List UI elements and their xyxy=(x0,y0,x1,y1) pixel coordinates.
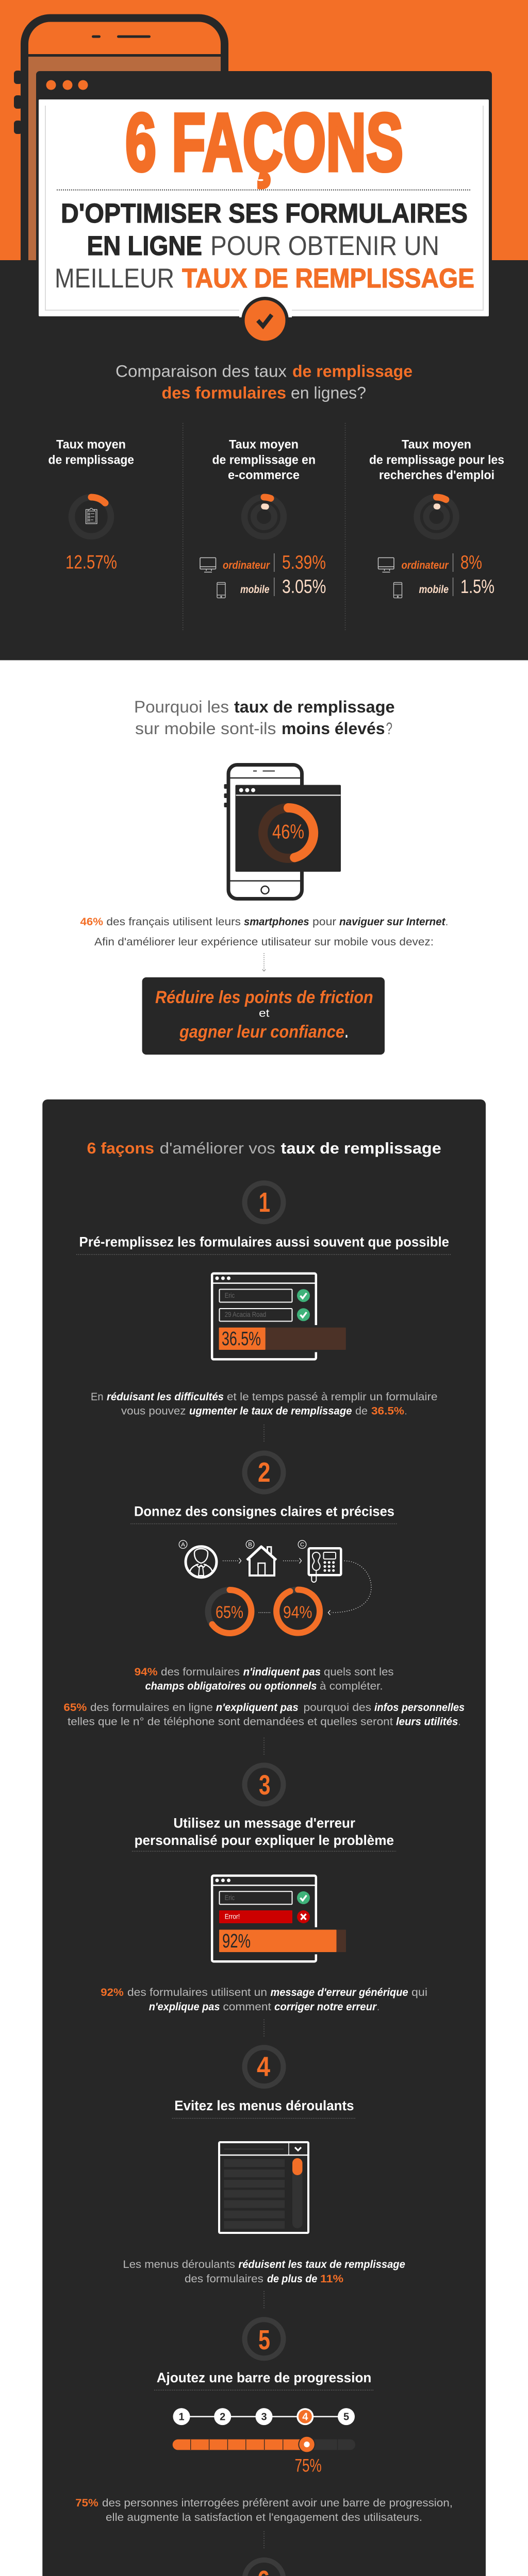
number badge 5 xyxy=(244,2319,284,2358)
number badge 3 xyxy=(244,1765,284,1804)
icon: person A xyxy=(179,1540,217,1578)
text: smartphones statistic: smartphones xyxy=(244,916,309,928)
text: step 1: vous pouvez xyxy=(121,1405,186,1417)
heading: why mobile rates are lower: moins élevés xyxy=(282,719,385,738)
heading: six ways: taux de remplissage xyxy=(281,1139,441,1157)
value: desktop 5.39% xyxy=(223,552,326,573)
text: smartphones statistic: naviguer sur Internet xyxy=(339,916,446,928)
value: desktop 8% xyxy=(401,552,482,573)
column: average rate xyxy=(48,438,134,573)
text: step 2: des formulaires en ligne xyxy=(90,1702,213,1714)
column: e-commerce rate xyxy=(200,438,326,598)
illustration: step indicator: 5 xyxy=(343,2411,349,2422)
heading: step 4: Evitez les menus déroulants xyxy=(174,2098,354,2113)
icon: person A: A xyxy=(181,1541,186,1548)
text: step 1: et le temps passé à remplir un formulaire xyxy=(227,1391,437,1403)
text: step 3: corriger notre erreur xyxy=(274,2001,377,2013)
heading: six ways: d'améliorer vos xyxy=(160,1139,275,1157)
value: desktop 8%: ordinateur xyxy=(401,560,449,571)
text: step 4: de plus de xyxy=(267,2273,318,2285)
heading: why mobile rates are lower: sur mobile sont-ils xyxy=(135,719,276,738)
bar chart: 36.5% xyxy=(219,1328,346,1350)
callout: reduce friction and gain trust: gagner leur confiance xyxy=(179,1022,344,1042)
icon: phone with 46% window xyxy=(224,765,341,899)
text: step 3: 92% xyxy=(101,1987,124,1998)
subtitle: D'OPTIMISER SES FORMULAIRES xyxy=(61,198,468,229)
illustration: step indicator: 3 xyxy=(261,2411,267,2422)
heading: recherches d'emploi: de remplissage pour les xyxy=(369,453,504,467)
illustration: prefilled form with 36.5% bar: 29 Acacia Road xyxy=(225,1310,266,1318)
illustration: prefilled form with 36.5% bar xyxy=(212,1274,346,1359)
text: step 1: ugmenter le taux de remplissage xyxy=(189,1405,352,1417)
number badge 2 xyxy=(244,1453,284,1492)
text: step 4: des formulaires xyxy=(185,2273,263,2285)
progress bar: 75% xyxy=(173,2436,355,2476)
illustration: step indicator xyxy=(173,2408,355,2425)
text: step 1: 36.5% xyxy=(371,1405,404,1417)
heading: e-commerce xyxy=(212,438,316,482)
number badge 3: 3 xyxy=(259,1770,270,1801)
subtitle: MEILLEUR xyxy=(55,263,174,294)
heading: e-commerce: de remplissage en xyxy=(212,453,316,467)
icon: mobile xyxy=(217,582,225,598)
bar chart: 92% xyxy=(219,1930,346,1952)
panel: six ways xyxy=(42,1099,486,2576)
text: step 1: . xyxy=(405,1405,407,1417)
text: step 3: qui xyxy=(411,1987,427,1998)
number badge 1 xyxy=(244,1183,284,1222)
heading: taux moyen: Taux moyen xyxy=(56,438,126,451)
subtitle: POUR OBTENIR UN xyxy=(210,231,439,261)
column: job search rate xyxy=(369,438,504,598)
text: step 2: telles que le n° de téléphone sont demandées et quelles seront xyxy=(68,1716,393,1728)
value: desktop 8%: 8% xyxy=(460,552,482,573)
text: step 2: pourquoi des xyxy=(303,1702,371,1714)
text: smartphones statistic xyxy=(80,916,448,948)
subtitle: TAUX DE REMPLISSAGE xyxy=(182,263,474,294)
text: step 4: 11% xyxy=(320,2273,343,2285)
value: desktop 5.39%: ordinateur xyxy=(223,560,271,571)
donut chart: 46%: 46% xyxy=(272,821,304,843)
heading: taux moyen: de remplissage xyxy=(48,453,134,467)
donut chart: 94%: 94% xyxy=(283,1603,312,1622)
donut chart: 12.57% xyxy=(72,497,111,536)
bar chart: 36.5%: 36.5% xyxy=(222,1328,261,1350)
heading: step 2: Donnez des consignes claires et précises xyxy=(134,1503,394,1519)
donut chart: 94% xyxy=(276,1590,320,1633)
illustration: step indicator: 1 xyxy=(178,2411,185,2422)
text: step 1: En xyxy=(91,1391,103,1403)
bar chart: 92%: 92% xyxy=(222,1930,251,1952)
icon: telephone C: C xyxy=(300,1541,304,1548)
icon: house B: B xyxy=(248,1541,252,1548)
heading: comparison: de remplissage xyxy=(292,362,412,380)
heading: recherches d'emploi: recherches d'emploi xyxy=(379,468,494,482)
callout: reduce friction and gain trust: Réduire les points de friction xyxy=(155,988,373,1007)
number badge 1: 1 xyxy=(259,1187,270,1218)
heading: why mobile rates are lower: ? xyxy=(386,719,392,738)
number badge 6 xyxy=(244,2560,284,2576)
text: step 2: n'expliquent pas xyxy=(216,1702,299,1714)
value: 12.57%: 12.57% xyxy=(65,551,117,573)
illustration: form with error and 92% bar: Eric xyxy=(225,1893,235,1902)
illustration: prefilled form with 36.5% bar: Eric xyxy=(225,1291,235,1299)
text: step 2: quels sont les xyxy=(324,1666,394,1678)
text: step 1: de xyxy=(355,1405,368,1417)
subtitle: EN LIGNE xyxy=(87,231,202,261)
donut chart: 65%: 65% xyxy=(216,1603,243,1622)
value: mobile 1.5% xyxy=(419,576,494,597)
text: step 2: des formulaires xyxy=(161,1666,240,1678)
heading: comparison: en lignes? xyxy=(291,383,366,402)
number badge 2: 2 xyxy=(258,1457,270,1488)
illustration: form with error and 92% bar: Error! xyxy=(225,1912,240,1921)
value: desktop 5.39%: 5.39% xyxy=(282,552,326,573)
illustration: step indicator: 2 xyxy=(220,2411,225,2422)
icon: clipboard xyxy=(86,508,97,523)
text: step 3: . xyxy=(377,2001,380,2013)
heading: step 3 xyxy=(135,1815,394,1848)
number badge 5: 5 xyxy=(258,2325,270,2355)
heading: taux moyen xyxy=(48,438,134,467)
heading: e-commerce: e-commerce xyxy=(228,468,300,482)
text: step 3: des formulaires utilisent un xyxy=(127,1987,267,1998)
heading: recherches d'emploi: Taux moyen xyxy=(402,438,471,451)
text: step 5 xyxy=(75,2497,453,2523)
arrow: dotted down xyxy=(262,953,266,971)
icon: house B xyxy=(246,1540,276,1575)
title: 6 façons: 6 FAÇONS xyxy=(125,96,403,188)
callout: reduce friction and gain trust xyxy=(142,977,385,1055)
text: step 3 xyxy=(101,1987,427,2013)
icon: large phone behind title window xyxy=(14,18,225,263)
heading: step 3: Utilisez un message d'erreur xyxy=(173,1815,355,1831)
value: mobile 3.05%: 3.05% xyxy=(282,576,326,597)
illustration: form with error and 92% bar xyxy=(212,1876,346,1961)
value: mobile 1.5%: mobile xyxy=(419,584,449,596)
text: smartphones statistic: pour xyxy=(312,916,336,928)
subtitle xyxy=(55,198,474,294)
heading: six ways xyxy=(87,1139,441,1157)
text: step 2: champs obligatoires ou optionnels xyxy=(145,1681,317,1692)
text: smartphones statistic: des français utilisent leurs xyxy=(106,916,241,928)
text: smartphones statistic: 46% xyxy=(80,916,103,928)
panel: hero orange background xyxy=(0,0,528,261)
text: step 2: n'indiquent pas xyxy=(243,1666,321,1678)
value: mobile 1.5%: 1.5% xyxy=(460,576,494,597)
heading: comparison: des formulaires xyxy=(162,383,286,402)
callout: reduce friction and gain trust: et xyxy=(259,1008,270,1019)
icon: check badge xyxy=(239,297,292,344)
text: step 4 xyxy=(123,2259,405,2285)
heading: step 5: Ajoutez une barre de progression xyxy=(157,2370,371,2385)
text: smartphones statistic: . xyxy=(446,916,448,928)
value: mobile 3.05%: mobile xyxy=(240,584,270,596)
heading: comparison xyxy=(116,362,412,402)
text: step 1 xyxy=(91,1391,437,1417)
icon: telephone C xyxy=(298,1540,341,1582)
icon: mobile xyxy=(394,582,402,598)
donut chart: desktop and mobile job search xyxy=(417,497,456,536)
donut chart: 46% xyxy=(263,808,314,858)
progress bar: 75%: 75% xyxy=(295,2455,322,2476)
text: smartphones statistic: Afin d'améliorer leur expérience utilisateur sur mobile vous devez: xyxy=(94,936,434,948)
donut chart: 65% xyxy=(208,1590,252,1633)
donut chart: desktop and mobile e-commerce xyxy=(244,497,284,536)
text: step 2 xyxy=(63,1666,465,1728)
text: step 2: . xyxy=(458,1716,460,1728)
text: step 5: 75% xyxy=(75,2497,98,2509)
number badge 4: 4 xyxy=(257,2052,270,2082)
text: step 2: leurs utilités xyxy=(396,1716,458,1728)
text: step 3: comment xyxy=(223,2001,271,2013)
panel: title window xyxy=(36,71,492,316)
icon: desktop xyxy=(378,557,394,572)
heading: why mobile rates are lower: taux de remplissage xyxy=(234,698,395,716)
heading: e-commerce: Taux moyen xyxy=(229,438,299,451)
text: step 2: 94% xyxy=(135,1666,158,1678)
illustration: step indicator: 4 xyxy=(302,2411,308,2422)
text: step 3: n'explique pas xyxy=(149,2001,220,2013)
illustration: dropdown menu xyxy=(219,2142,308,2233)
heading: six ways: 6 façons xyxy=(87,1139,154,1157)
arrow: person to house xyxy=(223,1558,241,1563)
value: mobile 3.05% xyxy=(240,576,326,597)
callout: reduce friction and gain trust: . xyxy=(345,1022,348,1042)
text: step 5: elle augmente la satisfaction et l'engagement des utilisateurs. xyxy=(106,2512,422,2523)
heading: step 1: Pré-remplissez les formulaires aussi souvent que possible xyxy=(79,1234,449,1250)
heading: why mobile rates are lower xyxy=(134,698,395,738)
arrow: house to phone xyxy=(283,1558,301,1563)
panel: dark comparison section xyxy=(0,260,528,660)
heading: why mobile rates are lower: Pourquoi les xyxy=(134,698,229,716)
text: step 5: des personnes interrogées préfèrent avoir une barre de progression, xyxy=(102,2497,453,2509)
heading: recherches d'emploi xyxy=(369,438,504,482)
text: step 2: à compléter. xyxy=(320,1681,383,1692)
text: step 1: réduisant les difficultés xyxy=(107,1391,224,1403)
text: step 2: 65% xyxy=(63,1702,87,1714)
icon: desktop xyxy=(200,557,216,572)
arrow: phone to donuts, curved xyxy=(328,1561,371,1615)
text: step 4: Les menus déroulants xyxy=(123,2259,235,2270)
number badge 4 xyxy=(244,2047,284,2086)
heading: comparison: Comparaison des taux xyxy=(116,362,287,380)
text: step 2: infos personnelles xyxy=(374,1702,465,1714)
text: step 3: message d'erreur générique xyxy=(270,1987,408,1998)
text: step 4: réduisent les taux de remplissage xyxy=(238,2259,405,2270)
heading: step 3: personnalisé pour expliquer le problème xyxy=(135,1833,394,1848)
